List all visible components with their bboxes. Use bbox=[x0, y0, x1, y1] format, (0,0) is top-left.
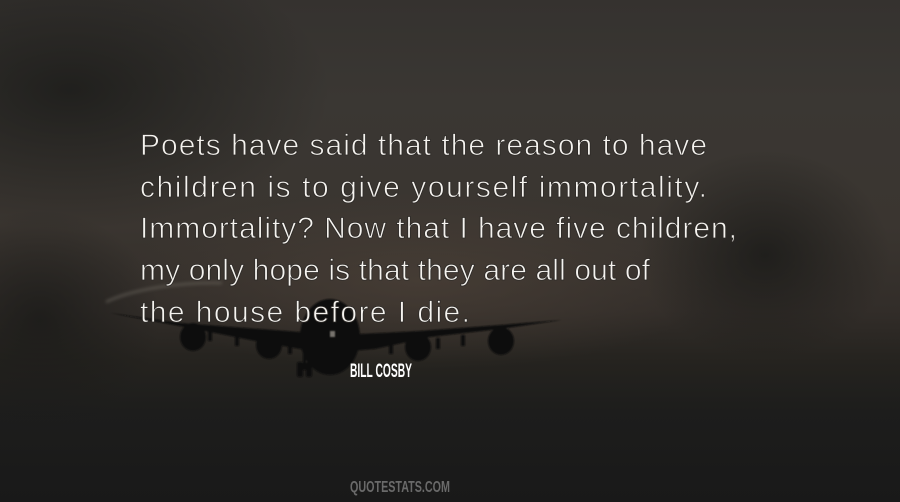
author name: BILL COSBY bbox=[350, 361, 412, 382]
right wing bbox=[340, 320, 562, 352]
landing gear bbox=[303, 350, 306, 370]
flaps bbox=[208, 330, 212, 341]
engines bbox=[180, 323, 206, 351]
quote line 5: the house before I die. bbox=[140, 296, 470, 329]
quote text bbox=[140, 129, 737, 329]
fuselage bbox=[300, 299, 360, 375]
quote line 2: children is to give yourself immortality. bbox=[140, 171, 707, 204]
left wing bbox=[110, 313, 335, 352]
cockpit lights bbox=[330, 331, 335, 337]
quote line 4: my only hope is that they are all out of bbox=[140, 254, 651, 287]
quote line 1: Poets have said that the reason to have bbox=[140, 129, 707, 162]
smoke trail bbox=[106, 283, 222, 302]
website credit: QUOTESTATS.COM bbox=[350, 479, 450, 496]
airplane silhouette bbox=[110, 299, 562, 377]
quote line 3: Immortality? Now that I have five children, bbox=[140, 212, 737, 245]
